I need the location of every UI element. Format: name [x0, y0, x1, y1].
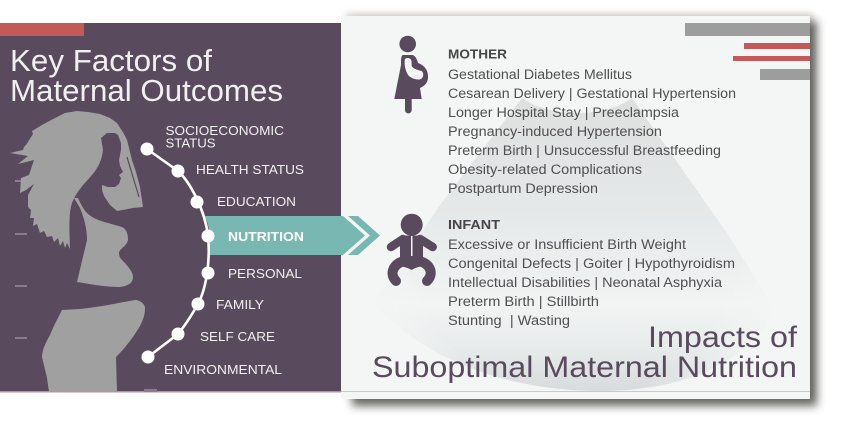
heading: impacts: Impacts of — [648, 321, 798, 354]
factor labels: SOCIOECONOMIC — [166, 123, 284, 138]
factor labels: FAMILY — [216, 297, 264, 312]
text block: infant: Preterm Birth | Stillbirth — [448, 294, 599, 309]
text block: infant: INFANT — [448, 217, 500, 232]
text block: mother: Postpartum Depression — [448, 181, 598, 196]
panel: impacts — [341, 16, 810, 399]
text block: mother — [448, 46, 736, 196]
factor labels — [164, 123, 304, 377]
heading: key factors: Maternal Outcomes — [10, 73, 283, 108]
text block: infant — [448, 217, 735, 328]
text block: mother: Gestational Diabetes Mellitus — [448, 67, 632, 82]
factor labels: ENVIRONMENTAL — [164, 362, 282, 377]
factor labels: NUTRITION — [228, 229, 304, 244]
text block: mother: Cesarean Delivery | Gestational Hypertension — [448, 86, 736, 101]
factor labels: SELF CARE — [200, 329, 275, 344]
factor labels: STATUS — [166, 136, 216, 150]
silhouette hair strand — [127, 157, 139, 197]
factor labels: PERSONAL — [228, 266, 302, 281]
text block: mother: Preterm Birth | Unsuccessful Breastfeeding — [448, 143, 721, 158]
heading: impacts: Suboptimal Maternal Nutrition — [372, 351, 797, 384]
bottom rule — [341, 391, 810, 392]
red accent bar — [0, 23, 84, 36]
text block: mother: Pregnancy-induced Hypertension — [448, 124, 662, 139]
heading: key factors — [10, 43, 283, 108]
text block: infant: Intellectual Disabilities | Neonatal Asphyxia — [448, 275, 723, 290]
heading: key factors: Key Factors of — [10, 43, 212, 78]
icon: infant — [391, 214, 433, 281]
text block: infant: Stunting | Wasting — [448, 313, 570, 328]
heading: impacts — [372, 321, 798, 384]
text block: mother: MOTHER — [448, 46, 508, 62]
panel shadow — [345, 12, 817, 406]
tick marks — [15, 180, 157, 392]
timeline — [140, 142, 214, 364]
text block: infant: Congenital Defects | Goiter | Hypothyroidism — [448, 256, 735, 271]
decorative bars — [685, 23, 810, 80]
ultrasound fan background — [420, 98, 740, 391]
icon: pregnant mother — [394, 36, 428, 113]
text block: infant: Excessive or Insufficient Birth Weight — [448, 237, 686, 252]
text block: mother: Longer Hospital Stay | Preeclampsia — [448, 105, 680, 120]
factor labels: HEALTH STATUS — [196, 162, 304, 177]
text block: mother: Obesity-related Complications — [448, 162, 642, 177]
silhouette: pregnant woman — [10, 111, 145, 392]
factor labels: EDUCATION — [217, 194, 296, 209]
arrow: nutrition band — [205, 216, 380, 255]
panel: key factors — [0, 23, 341, 392]
